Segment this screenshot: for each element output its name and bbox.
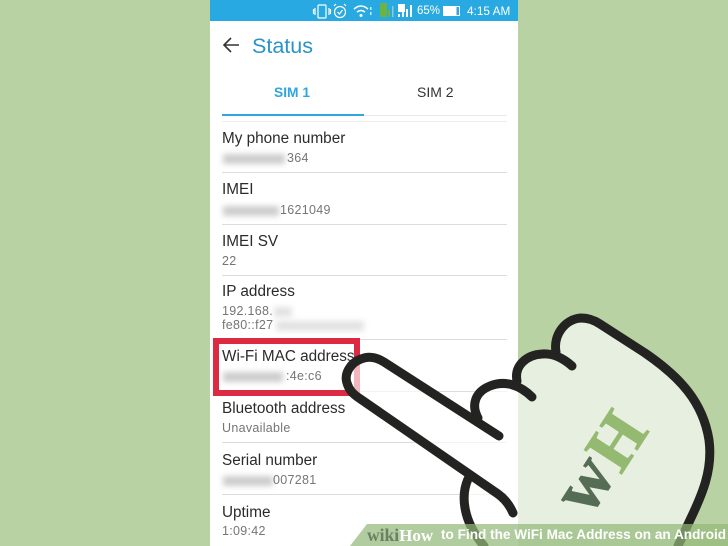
battery percent: 65% bbox=[417, 5, 440, 17]
row: Uptime bbox=[222, 504, 270, 538]
tab: SIM 2: SIM 2 bbox=[417, 84, 454, 100]
clock: 4:15 AM bbox=[467, 4, 510, 18]
row: Wi-Fi MAC address bbox=[220, 348, 355, 384]
logo: wH rotated bbox=[535, 398, 662, 527]
row: IMEI bbox=[220, 181, 331, 218]
row: IP address: 192.168. bbox=[222, 304, 273, 318]
row: Bluetooth address: Unavailable bbox=[222, 421, 291, 435]
icon: back arrow bbox=[223, 37, 239, 53]
row: Uptime: 1:09:42 bbox=[222, 524, 266, 538]
status bar icons bbox=[312, 3, 460, 19]
logo: wH rotated: w bbox=[535, 440, 631, 527]
heading: Status: Status bbox=[252, 34, 313, 58]
row: IMEI SV: IMEI SV bbox=[222, 233, 278, 250]
row: Serial number bbox=[220, 452, 317, 488]
row: Uptime: Uptime bbox=[222, 504, 270, 521]
row: IMEI: IMEI bbox=[222, 181, 253, 198]
row: IMEI: 1621049 bbox=[280, 203, 331, 217]
row: Wi-Fi MAC address: :4e:c6 bbox=[286, 369, 322, 383]
banner logo text: wikiHow bbox=[367, 525, 433, 545]
row: Bluetooth address: Bluetooth address bbox=[222, 400, 345, 417]
phone screen bbox=[210, 0, 518, 546]
row: My phone number bbox=[220, 130, 346, 166]
row: My phone number: 364 bbox=[287, 151, 309, 165]
row: IP address: fe80::f27 bbox=[222, 318, 273, 332]
row: IMEI SV bbox=[222, 233, 278, 268]
row: IP address bbox=[222, 283, 366, 332]
row: Serial number: Serial number bbox=[222, 452, 317, 469]
row: My phone number: My phone number bbox=[222, 130, 345, 147]
callout: red highlight box bbox=[213, 338, 360, 396]
tab indicator bbox=[222, 114, 364, 116]
row: Bluetooth address bbox=[222, 400, 345, 435]
row: Wi-Fi MAC address: Wi-Fi MAC address bbox=[222, 348, 355, 365]
banner text: to Find the WiFi Mac Address on an Android bbox=[441, 527, 726, 542]
tab: SIM 1: SIM 1 bbox=[274, 85, 310, 100]
row: Serial number: 007281 bbox=[273, 473, 317, 487]
status bar bbox=[210, 0, 518, 21]
logo: wH rotated: H bbox=[570, 398, 662, 483]
row: IMEI SV: 22 bbox=[222, 254, 237, 268]
row: IP address: IP address bbox=[222, 283, 295, 300]
